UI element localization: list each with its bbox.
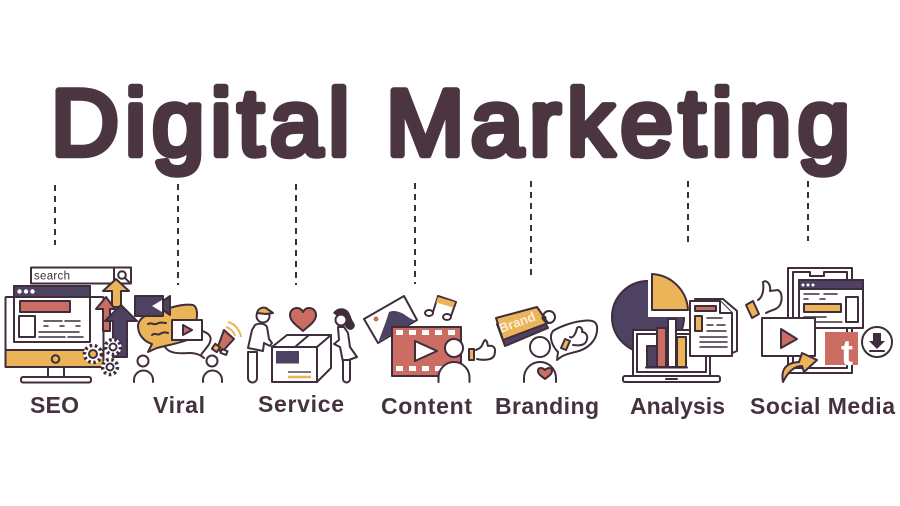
dashed connectors: [55, 181, 808, 285]
icon: Service: [248, 308, 357, 383]
delivery man: [248, 308, 273, 382]
labels: SEO: [30, 392, 79, 418]
heart: [290, 308, 316, 331]
person: [524, 337, 556, 382]
labels: Analysis: [630, 393, 725, 419]
labels: [30, 391, 895, 419]
film strip: [392, 327, 461, 376]
tumblr tile: [825, 332, 858, 373]
icon: Analysis: [612, 270, 737, 382]
woman: [333, 308, 357, 383]
icon: SEO: [6, 268, 137, 382]
growth arrows: [96, 279, 137, 357]
box: [272, 335, 331, 382]
document: [690, 299, 737, 356]
title: Marketing: [386, 70, 856, 175]
labels: Viral: [153, 392, 205, 418]
icon: Viral: [134, 296, 241, 382]
thumb bubble: [551, 320, 597, 360]
bars: [646, 319, 687, 368]
share arrow: [782, 353, 817, 382]
thumbs up: [746, 281, 782, 318]
download icon: [862, 327, 892, 357]
phone: [788, 268, 852, 373]
music notes: [425, 296, 456, 320]
photo: [364, 296, 417, 343]
icon: Branding: [496, 307, 597, 382]
icon: Social Media: [746, 268, 892, 382]
brand tag: Brand: [497, 309, 537, 336]
monitor: [6, 286, 104, 382]
search bar: search: [34, 270, 70, 282]
people: [134, 356, 222, 382]
laptop: [623, 330, 720, 382]
person: [438, 339, 470, 382]
video: [762, 318, 815, 356]
megaphone: [212, 322, 241, 355]
labels: Content: [381, 393, 472, 419]
thumbs up: [469, 340, 495, 360]
browser window: [799, 280, 863, 328]
gears: [84, 338, 122, 376]
icon: Content: [364, 296, 495, 382]
video camera: [135, 296, 170, 316]
title: Digital: [51, 70, 356, 175]
labels: Social Media: [750, 393, 895, 419]
pie chart: [612, 270, 693, 353]
speech bubble: [138, 305, 197, 352]
tumblr tile: t: [841, 332, 853, 373]
labels: Service: [258, 391, 344, 417]
video frame: [172, 320, 202, 340]
labels: Branding: [495, 393, 599, 419]
